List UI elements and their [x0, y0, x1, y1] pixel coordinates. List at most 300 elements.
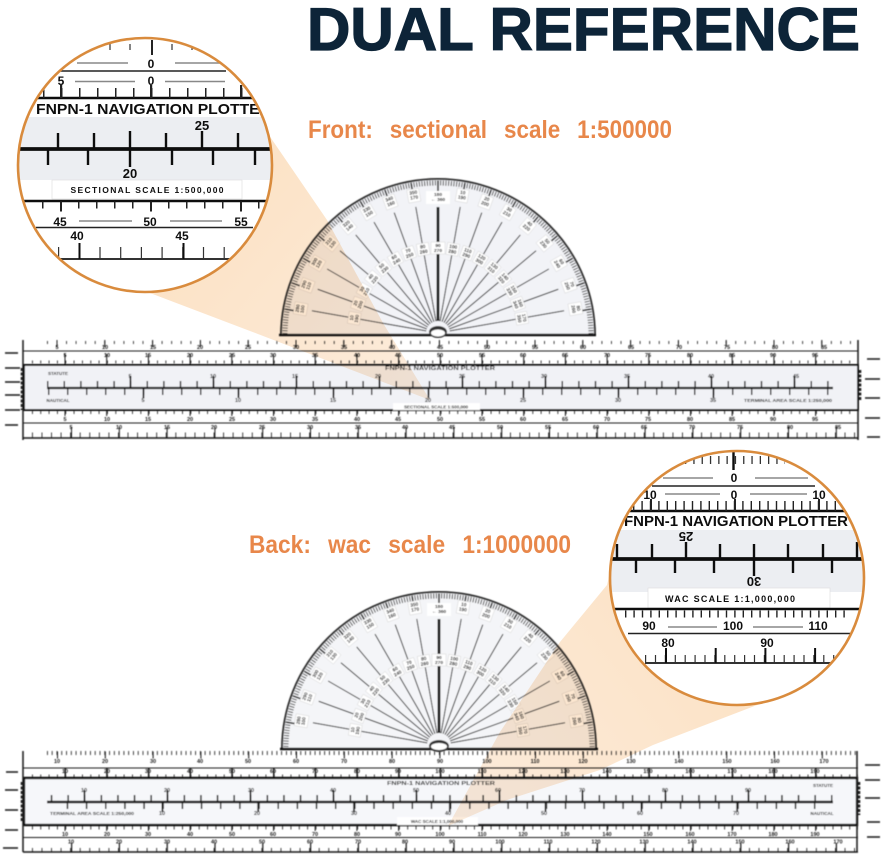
spoke 360: 90: [435, 243, 441, 249]
spoke 80, back: 260: [570, 717, 578, 726]
spoke 320, back: 230: [381, 677, 392, 687]
scale numbers: front row 4: 80: [787, 425, 793, 431]
scale numbers: back upper: 30: [248, 788, 254, 794]
spoke 30: 120: [477, 253, 487, 262]
scale numbers: front row 2: 45: [395, 353, 401, 359]
scale numbers: front row 2: 30: [270, 353, 276, 359]
scale numbers: front row 2: 5: [63, 353, 67, 359]
spoke 330: [360, 204, 437, 326]
spoke 10: [434, 188, 469, 322]
spoke 60: [445, 255, 567, 332]
caption: back wac scale: Back: wac scale 1:1000000: [249, 531, 571, 559]
scale numbers: back row 1: 90: [437, 759, 443, 765]
scale numbers: front row 2: 80: [687, 353, 693, 359]
scale numbers: back row 4: 40: [211, 840, 217, 846]
spoke 60, back: 150: [510, 697, 519, 707]
scale numbers: front row 2: 75: [645, 353, 651, 359]
spoke 310, back: 220: [371, 687, 381, 697]
spoke 70, back: [448, 689, 578, 747]
scale numbers: front upper: 40: [708, 374, 714, 380]
scale numbers: front row 4: 25: [259, 425, 265, 431]
scale numbers: front row 4: 60: [593, 425, 599, 431]
spoke 10: 10: [460, 190, 466, 197]
spoke 30, back: 300: [475, 669, 485, 679]
spoke 320, back: [341, 629, 436, 740]
spoke 20, back: [437, 606, 495, 736]
spoke 30, back: 210: [503, 622, 513, 631]
scale numbers: back row 3: 180: [768, 832, 778, 838]
spoke 290: [299, 277, 429, 335]
spoke 350, back: 350: [410, 601, 419, 609]
scale numbers: front row 1: 55: [532, 345, 538, 351]
spoke 80: 260: [569, 305, 577, 314]
spoke 20, back: 20: [484, 608, 491, 615]
scale numbers: back lower: 50: [541, 811, 547, 817]
spoke 20: 20: [483, 196, 490, 203]
spoke 10, back: 100: [450, 656, 459, 663]
spoke 300: 30: [359, 285, 367, 293]
spoke 70: [447, 277, 577, 335]
scale numbers: back row 3: 150: [643, 832, 653, 838]
lens tag: sectional scale: SECTIONAL SCALE 1:500,000: [70, 185, 224, 195]
spoke 280: 280: [295, 304, 302, 313]
spoke 280, back: 100: [300, 716, 308, 726]
spoke 10: 190: [457, 194, 467, 202]
spoke 30: 210: [502, 210, 512, 219]
scale numbers: front row 3: 40: [354, 417, 360, 423]
lens numbers: row three: 50: [143, 215, 157, 229]
scale numbers: back row 3: 140: [602, 832, 612, 838]
scale numbers: front row 1: 40: [389, 345, 395, 351]
scale numbers: back row 2: 90: [395, 769, 401, 775]
label: nautical, back: NAUTICAL: [810, 811, 834, 816]
spoke 280: [293, 302, 427, 337]
lens numbers: row four: 45: [175, 229, 189, 243]
spoke 310: 220: [370, 275, 380, 285]
spoke 310: 310: [324, 236, 334, 247]
scale numbers: front row 4: 65: [641, 425, 647, 431]
spoke 60: 150: [509, 285, 518, 295]
window: front scale panel: [24, 365, 858, 410]
scale numbers: front row 4: 75: [737, 425, 743, 431]
spoke 300: [309, 255, 431, 332]
scale numbers: front row 1: 15: [150, 345, 156, 351]
spoke 350, back: 260: [420, 661, 430, 668]
magnifier wedge: front: [150, 125, 430, 400]
spoke 40: 310: [486, 265, 496, 275]
spoke 350, back: 170: [411, 606, 420, 614]
scale numbers: front row 1: 85: [821, 345, 827, 351]
spoke 30: 30: [505, 206, 513, 214]
magnifier circle: back: [610, 451, 864, 705]
spoke 10: 100: [449, 244, 458, 251]
scale numbers: back row 4: 90: [449, 840, 455, 846]
scale numbers: front row 4: 85: [835, 425, 841, 431]
spoke 20: [436, 194, 494, 324]
window: back scale panel: [24, 778, 857, 825]
spoke 350, back: 80: [421, 656, 427, 663]
scale numbers: back row 2: 140: [602, 769, 612, 775]
spoke 360: 270: [434, 248, 442, 254]
scale numbers: front upper: 10: [210, 374, 216, 380]
scale numbers: front row 1: 45: [437, 345, 443, 351]
spoke 320, back: 140: [346, 635, 356, 645]
spoke 340: 160: [386, 200, 396, 208]
scale numbers: back row 1: 40: [197, 759, 203, 765]
spoke 310, back: 130: [329, 652, 339, 662]
scale numbers: back row 3: 110: [478, 832, 486, 838]
spoke 50, back: 230: [539, 652, 549, 662]
label: terminal area scale, back: TERMINAL AREA SCALE 1:250,000: [50, 811, 135, 816]
scale numbers: back row 4: 80: [402, 840, 408, 846]
spoke 60: 60: [557, 258, 565, 266]
scale numbers: front row 2: 55: [479, 353, 485, 359]
lens numbers: row three: 55: [234, 215, 248, 229]
scale numbers: back row 2: 110: [478, 769, 486, 775]
spoke 10, back: [435, 600, 470, 734]
scale numbers: front row 3: 80: [687, 417, 693, 423]
scale numbers: back row 4: 170: [833, 840, 843, 846]
scale numbers: back row 3: 70: [312, 832, 318, 838]
scale numbers: back row 2: 160: [685, 769, 695, 775]
spoke 30: [439, 204, 516, 326]
spoke 350: 260: [419, 249, 429, 256]
spoke 40, back: 310: [487, 677, 497, 687]
lens numbers: statute row, back: 10: [812, 488, 826, 502]
scale numbers: back row 3: 50: [229, 832, 235, 838]
scale numbers: back row 3: 30: [145, 832, 151, 838]
spoke 70: 250: [563, 281, 571, 291]
spoke 10, back: 280: [449, 661, 458, 668]
spoke 40: 220: [521, 223, 531, 233]
spoke 40, back: 130: [490, 673, 500, 683]
scale numbers: front row 1: 25: [245, 345, 251, 351]
lens tag: sectional scale: [52, 180, 242, 199]
spoke 340, back: 70: [406, 659, 413, 667]
spoke 290: 290: [300, 279, 309, 289]
scale numbers: front lower: 20: [425, 398, 431, 404]
magnifier wedge: back: [448, 540, 770, 826]
scale numbers: front row 3: 65: [562, 417, 568, 423]
scale numbers: back row 1: 150: [722, 759, 732, 765]
spoke 330: 150: [365, 210, 375, 219]
spoke 360, back: 270: [435, 660, 443, 666]
spoke 340, back: 250: [406, 664, 416, 672]
scale numbers: front row 3: 95: [812, 417, 818, 423]
scale numbers: back upper: 80: [662, 788, 668, 794]
spoke 70, back: 250: [564, 693, 572, 703]
scale numbers: front row 4: 40: [402, 425, 408, 431]
wac scale tag: [397, 817, 478, 825]
spoke 50: 230: [538, 240, 548, 250]
spoke 340: 70: [405, 247, 412, 255]
scale numbers: back upper: 50: [413, 788, 419, 794]
spoke 70: 160: [516, 298, 524, 308]
spoke 320: 140: [345, 223, 355, 233]
scale numbers: front row 2: 35: [312, 353, 318, 359]
scale numbers: front row 4: 5: [69, 425, 73, 431]
spoke 290: 20: [353, 299, 360, 307]
label: nautical: NAUTICAL: [46, 398, 70, 403]
lens tag: wac scale: WAC SCALE 1:1,000,000: [665, 594, 795, 604]
scale numbers: back row 3: 120: [518, 832, 528, 838]
spoke 350, back: [408, 600, 443, 734]
scale numbers: front lower: 15: [330, 398, 336, 404]
plotter: back side: [3, 751, 880, 852]
spoke 20: 200: [480, 200, 490, 209]
spoke 10, back: 190: [458, 606, 468, 614]
scale numbers: back row 2: 80: [354, 769, 360, 775]
scale numbers: front lower: 30: [615, 398, 621, 404]
spoke 20, back: 110: [464, 659, 474, 668]
spoke 40, back: 220: [522, 635, 532, 645]
scale numbers: back row 1: 130: [626, 759, 636, 765]
spoke 290: 110: [305, 281, 314, 291]
scale numbers: back row 4: 50: [259, 840, 265, 846]
spoke 50: 140: [500, 272, 510, 282]
spoke 50, back: 140: [501, 684, 511, 694]
spoke 50, back: 320: [497, 687, 507, 698]
spoke 280, back: 190: [355, 726, 362, 735]
spoke 80, back: 350: [516, 726, 523, 736]
scale numbers: back row 2: 20: [104, 769, 110, 775]
spoke 340: 250: [405, 252, 415, 260]
spoke 330: 60: [391, 254, 399, 262]
scale numbers: back upper: 60: [495, 788, 501, 794]
lens number: nautical zero, back: 0: [731, 471, 738, 485]
spoke 50: 320: [496, 275, 506, 286]
spoke 300: 120: [315, 259, 324, 269]
lens numbers: statute row, back: 10: [643, 488, 657, 502]
scale numbers: front upper: 20: [375, 374, 381, 380]
scale numbers: back row 2: 190: [810, 769, 820, 775]
lens plotter name, back: FNPN-1 NAVIGATION PLOTTER: [624, 513, 848, 530]
scale numbers: front row 3: 85: [729, 417, 735, 423]
spoke 60: 240: [552, 260, 561, 270]
scale numbers: back row 4: 120: [591, 840, 601, 846]
scale numbers: back row 4: 140: [687, 840, 697, 846]
scale numbers: front row 3: 90: [770, 417, 776, 423]
spoke 70, back: 70: [569, 693, 576, 700]
spoke 20: 110: [463, 247, 473, 256]
scale numbers: front row 4: 30: [307, 425, 313, 431]
scale numbers: front row 2: 10: [104, 353, 110, 359]
scale numbers: front row 2: 60: [520, 353, 526, 359]
lens numbers: row three, back: 100: [723, 619, 743, 633]
spoke 50: [443, 235, 554, 330]
scale numbers: front row 3: 60: [520, 417, 526, 423]
scale numbers: front row 1: 10: [102, 345, 108, 351]
scale numbers: front row 4: 45: [449, 425, 455, 431]
label: statute: STATUTE: [48, 371, 68, 376]
scale numbers: back row 2: 70: [312, 769, 318, 775]
spoke 300, back: 210: [363, 699, 373, 709]
spoke 320, back: 50: [379, 674, 387, 682]
scale numbers: back row 4: 100: [495, 840, 505, 846]
scale numbers: back row 1: 70: [341, 759, 347, 765]
scale numbers: front upper: 15: [292, 374, 298, 380]
spoke 320: [340, 217, 435, 328]
scale numbers: back row 1: 50: [245, 759, 251, 765]
spoke 60, back: [446, 667, 568, 744]
spoke 320: 50: [378, 262, 386, 270]
scale numbers: back row 2: 50: [229, 769, 235, 775]
spoke 300: 210: [362, 287, 372, 297]
scale numbers: front upper: 5: [128, 374, 132, 380]
spoke 290: 200: [357, 300, 365, 310]
scale numbers: front row 4: 20: [211, 425, 217, 431]
scale numbers: back row 2: 10: [62, 769, 68, 775]
label: statute, back: STATUTE: [813, 783, 833, 788]
lens numbers: row four, back: 90: [760, 636, 774, 650]
sectional scale tag: [393, 403, 480, 410]
spoke 300, back: [310, 667, 432, 744]
lens numbers: row three, back: 90: [642, 619, 656, 633]
scale numbers: back row 3: 90: [395, 832, 401, 838]
scale numbers: front row 1: 35: [341, 345, 347, 351]
spoke 40: [441, 217, 536, 328]
scale numbers: back row 2: 170: [727, 769, 737, 775]
spoke 80, back: 170: [521, 725, 528, 735]
scale numbers: back row 3: 10: [62, 832, 68, 838]
spoke 320: 230: [380, 265, 391, 275]
spoke 340: 340: [385, 195, 395, 204]
scale numbers: front lower: 25: [520, 398, 526, 404]
scale numbers: back upper: 20: [164, 788, 170, 794]
scale numbers: back row 2: 150: [643, 769, 653, 775]
plotter name: FNPN-1 NAVIGATION PLOTTER: [385, 366, 495, 372]
scale numbers: front lower: 35: [710, 398, 716, 404]
spoke 80: 170: [520, 313, 527, 323]
lens number 25: 25: [195, 118, 209, 133]
scale numbers: back upper: 40: [330, 788, 336, 794]
spoke 60, back: 60: [558, 670, 566, 678]
spoke 70: 340: [511, 300, 519, 310]
scale numbers: back row 3: 80: [354, 832, 360, 838]
plotter name, back: FNPN-1 NAVIGATION PLOTTER: [387, 781, 495, 787]
spoke 350: 350: [409, 189, 418, 197]
scale numbers: front row 2: 90: [770, 353, 776, 359]
spoke 80, back: [450, 714, 584, 749]
wac scale tag: WAC SCALE 1:1,000,000: [411, 819, 464, 824]
spoke 20, back: 290: [462, 664, 472, 672]
spoke 360, back: 90: [436, 655, 442, 661]
spoke 290, back: [300, 689, 430, 747]
spoke 330: 240: [392, 257, 402, 267]
spoke 360: 180: [434, 192, 442, 198]
scale numbers: front row 2: 15: [145, 353, 151, 359]
scale numbers: front row 3: 45: [395, 417, 401, 423]
scale numbers: back row 4: 150: [735, 840, 745, 846]
scale numbers: front row 4: 15: [164, 425, 170, 431]
scale numbers: back row 1: 170: [819, 759, 829, 765]
lens numbers: statute row: 0: [148, 74, 155, 88]
scale numbers: back lower: 20: [254, 811, 260, 817]
spoke 310: 130: [328, 240, 338, 250]
scale numbers: back row 3: 20: [104, 832, 110, 838]
scale numbers: front lower: 5: [141, 398, 145, 404]
scale numbers: back row 1: 110: [531, 759, 539, 765]
scale numbers: back row 2: 130: [560, 769, 570, 775]
scale numbers: front row 3: 70: [604, 417, 610, 423]
spoke 330: 330: [362, 205, 372, 215]
scale numbers: front upper: 45: [793, 374, 799, 380]
scale numbers: back row 2: 120: [518, 769, 528, 775]
scale numbers: front row 4: 50: [497, 425, 503, 431]
spoke 330, back: 60: [392, 666, 400, 674]
lens numbers: row four, back: 80: [661, 636, 675, 650]
scale numbers: back row 2: 40: [187, 769, 193, 775]
scale numbers: back row 4: 70: [355, 840, 361, 846]
spoke 290, back: 20: [354, 711, 361, 719]
spoke 310, back: 310: [325, 648, 335, 659]
caption: front sectional scale: Front: sectional scale 1:500000: [308, 116, 672, 144]
scale numbers: back row 1: 160: [770, 759, 780, 765]
scale numbers: front row 3: 10: [104, 417, 110, 423]
spoke 30, back: 120: [478, 665, 488, 674]
scale numbers: back lower: 70: [733, 811, 739, 817]
scale numbers: back row 1: 20: [102, 759, 108, 765]
spoke 70: 70: [568, 281, 575, 288]
spoke 360: [426, 191, 450, 321]
spoke 60, back: 240: [553, 672, 562, 682]
spoke 320, back: 320: [343, 631, 353, 641]
scale numbers: front row 1: 65: [628, 345, 634, 351]
scale numbers: front row 3: 30: [270, 417, 276, 423]
lens number 20: 20: [123, 166, 137, 181]
scale numbers: front row 1: 75: [724, 345, 730, 351]
spoke 340, back: 340: [386, 607, 396, 616]
label: terminal area scale: TERMINAL AREA SCALE 1:250,000: [744, 398, 833, 403]
lens number 25, inverted: 25: [679, 529, 693, 544]
scale numbers: front row 2: 25: [229, 353, 235, 359]
scale numbers: front row 3: 15: [145, 417, 151, 423]
spoke 360, back: ← 360: [432, 609, 446, 615]
spoke 50, back: [444, 647, 555, 742]
spoke 50, back: 50: [544, 650, 552, 658]
scale numbers: back lower: 30: [351, 811, 357, 817]
lens numbers: row three, back: 110: [808, 619, 828, 633]
spoke 310: 40: [367, 273, 376, 281]
scale numbers: front row 1: 20: [197, 345, 203, 351]
scale numbers: front row 1: 50: [484, 345, 490, 351]
lens plotter name: FNPN-1 NAVIGATION PLOTTER: [36, 101, 271, 118]
scale numbers: front upper: 30: [541, 374, 547, 380]
spoke 300, back: 120: [316, 671, 325, 681]
spoke 300, back: 300: [311, 669, 321, 679]
spoke 330, back: 150: [366, 622, 376, 631]
spoke 340, back: [383, 606, 441, 736]
scale numbers: front row 1: 70: [676, 345, 682, 351]
spoke 80: 80: [574, 305, 581, 312]
scale numbers: back row 3: 170: [727, 832, 737, 838]
scale numbers: front row 3: 35: [312, 417, 318, 423]
spoke 360: ← 360: [431, 197, 445, 203]
spoke 10, back: 10: [461, 602, 467, 609]
scale numbers: back row 4: 160: [785, 840, 795, 846]
scale numbers: back row 3: 100: [435, 832, 445, 838]
scale numbers: front row 1: 30: [293, 345, 299, 351]
spoke 300: 300: [310, 257, 320, 267]
spoke 330, back: 240: [393, 669, 403, 679]
scale numbers: back row 2: 100: [435, 769, 445, 775]
protractor: back: [280, 592, 598, 752]
scale numbers: front row 2: 85: [729, 353, 735, 359]
scale numbers: front row 2: 20: [187, 353, 193, 359]
scale numbers: back row 1: 60: [293, 759, 299, 765]
spoke 340: [382, 194, 440, 324]
spoke 310: [322, 235, 433, 330]
